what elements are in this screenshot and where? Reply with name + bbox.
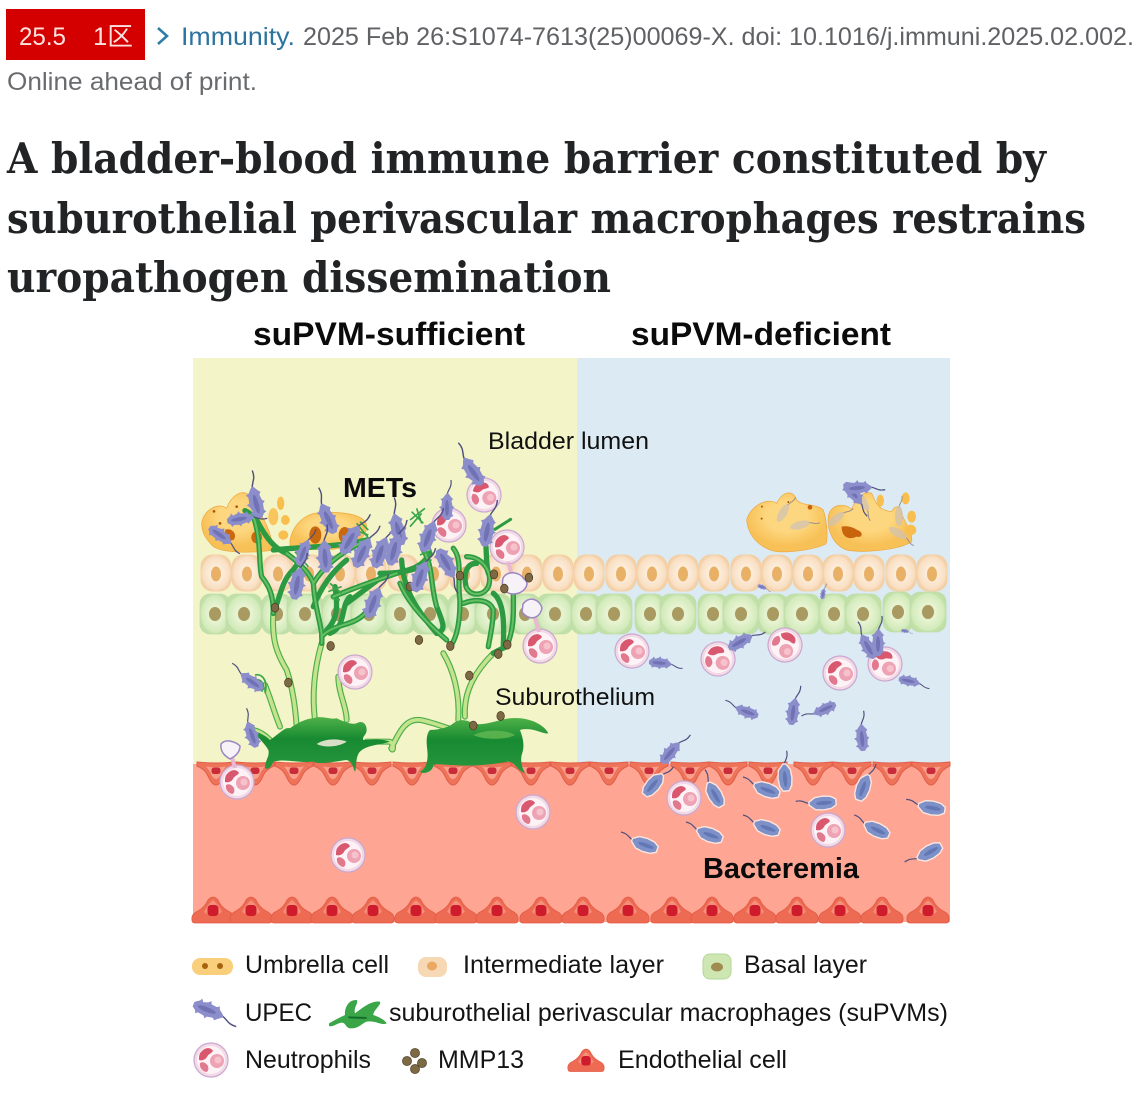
intermediate layer cells (200, 554, 948, 592)
suPVM dendrite network crossing the urothelium (245, 508, 513, 693)
heading: suPVM-deficient: suPVM-deficient (631, 316, 891, 352)
legend icon: basal layer (703, 954, 731, 979)
panel: deficient background (577, 358, 950, 766)
label: METs: METs (343, 472, 417, 503)
UPEC bacteria: deficient side, suburothelium (648, 478, 931, 768)
header: impact factor badge: 1区 (93, 23, 133, 51)
label: Suburothelium: Suburothelium (495, 684, 655, 711)
legend icon: umbrella cell (192, 958, 233, 975)
suPVM macrophage left and right: body and stalks (252, 613, 548, 773)
title: A bladder-blood immune barrier constituted by (6, 134, 1047, 183)
UPEC bacteria: bloodstream (617, 750, 946, 872)
legend: neutrophils: Neutrophils (245, 1046, 371, 1074)
legend icon: suPVM (329, 1000, 387, 1028)
legend icon: intermediate layer (418, 957, 447, 977)
online status: Online ahead of print. (7, 68, 257, 96)
legend: intermediate layer: Intermediate layer (463, 951, 664, 979)
NET coils trapping bacteria (253, 508, 432, 693)
label: Bacteremia: Bacteremia (703, 853, 860, 885)
title (6, 134, 1086, 302)
legend icon: endothelial cell (568, 1049, 604, 1072)
legend: UPEC: UPEC (245, 999, 312, 1027)
citation: journal: Immunity. (181, 23, 295, 51)
legend: endothelial cell: Endothelial cell (618, 1046, 787, 1074)
citation: details: 2025 Feb 26:S1074-7613(25)00069-X. doi: 10.1016/j.immuni.2025.02.002. (303, 23, 1134, 51)
legend: suburothelial perivascular macrophages: suburothelial perivascular macrophages (suPVMs) (389, 999, 948, 1027)
legend icon: MMP13 (402, 1048, 427, 1074)
bottom endothelial cells (192, 897, 949, 923)
top endothelial cells (197, 762, 950, 785)
legend (190, 951, 948, 1077)
blood vessel lumen (193, 764, 950, 922)
ghost bacteria inside umbrella cells (775, 491, 917, 546)
legend icon: UPEC (190, 995, 242, 1030)
neutrophils (220, 473, 909, 872)
panel: bladder diagram (192, 358, 950, 923)
header: impact factor badge: 25.5 (19, 23, 66, 51)
legend: umbrella cell: Umbrella cell (245, 951, 389, 979)
legend: MMP13: MMP13 (438, 1046, 524, 1074)
MMP13 granules (271, 570, 533, 730)
UPEC bacteria: sufficient side (205, 440, 501, 750)
header: impact factor badge (6, 9, 145, 60)
label: Bladder lumen: Bladder lumen (488, 428, 649, 455)
umbrella cells: right (747, 492, 916, 552)
heading: suPVM-sufficient: suPVM-sufficient (253, 316, 525, 352)
basal layer cells (200, 592, 946, 634)
legend: basal layer: Basal layer (744, 951, 867, 979)
icon: chevron (158, 28, 167, 44)
title: uropathogen dissemination (7, 253, 611, 302)
neutrophil blebs forming extracellular traps (221, 562, 542, 768)
umbrella cells: left (202, 493, 367, 552)
legend icon: neutrophil (194, 1043, 228, 1077)
panel: sufficient background (193, 358, 577, 766)
